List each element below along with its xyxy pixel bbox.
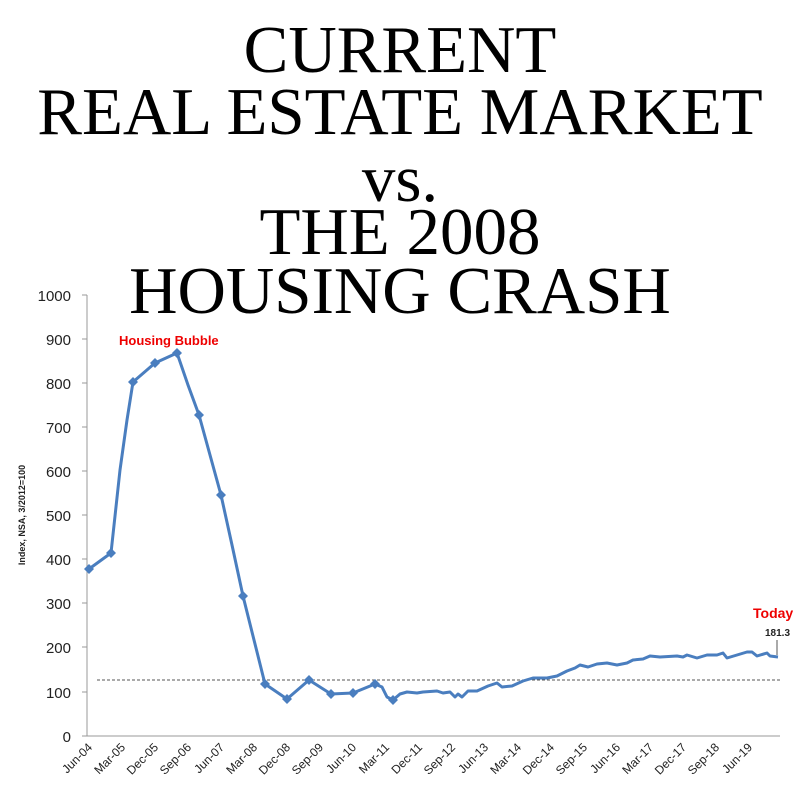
y axis title: Index, NSA, 3/2012=100 <box>17 465 27 565</box>
y axis: 600 <box>46 464 71 481</box>
annotation: housing bubble: Housing Bubble <box>119 333 219 348</box>
y axis <box>38 288 780 746</box>
x axis labels: Sep-09 <box>289 740 326 777</box>
x axis labels: Jun-13 <box>455 740 491 776</box>
x axis labels: Mar-14 <box>487 740 524 777</box>
title: CURRENT <box>244 13 556 87</box>
x axis labels: Sep-12 <box>421 740 458 777</box>
dashed reference line <box>97 679 780 681</box>
x axis labels <box>59 740 755 777</box>
annotation: today: 181.3 <box>765 628 790 639</box>
x axis labels: Mar-11 <box>356 740 392 776</box>
y axis: 1000 <box>38 288 71 305</box>
x axis labels: Dec-08 <box>256 740 293 777</box>
y axis: 800 <box>46 376 71 393</box>
x axis labels: Dec-17 <box>652 740 689 777</box>
x axis labels: Sep-06 <box>157 740 194 777</box>
annotation: today <box>753 605 793 655</box>
title: REAL ESTATE MARKET <box>37 75 763 149</box>
x axis labels: Mar-17 <box>619 740 656 777</box>
x axis labels: Sep-18 <box>685 740 722 777</box>
x axis labels: Dec-05 <box>124 740 161 777</box>
y axis: 900 <box>46 332 71 349</box>
data line <box>84 348 778 705</box>
title: HOUSING CRASH <box>129 254 671 328</box>
y axis: 0 <box>63 729 71 746</box>
title: THE 2008 <box>260 195 540 269</box>
x axis labels: Jun-10 <box>323 740 359 776</box>
y axis: 500 <box>46 508 71 525</box>
y axis: 300 <box>46 596 71 613</box>
y axis: 200 <box>46 640 71 657</box>
title: vs. <box>362 142 438 216</box>
x axis labels: Dec-14 <box>520 740 557 777</box>
y axis: 400 <box>46 552 71 569</box>
x axis labels: Jun-07 <box>191 740 227 776</box>
x axis labels: Dec-11 <box>388 740 425 777</box>
y axis: 100 <box>46 685 71 702</box>
x axis labels: Sep-15 <box>553 740 590 777</box>
x axis labels: Jun-19 <box>719 740 755 776</box>
x axis labels: Mar-05 <box>91 740 128 777</box>
x axis labels: Jun-16 <box>587 740 623 776</box>
x axis labels: Mar-08 <box>223 740 260 777</box>
x axis labels: Jun-04 <box>59 740 95 776</box>
title <box>37 13 763 328</box>
y axis: 700 <box>46 420 71 437</box>
annotation: today: Today <box>753 605 793 621</box>
